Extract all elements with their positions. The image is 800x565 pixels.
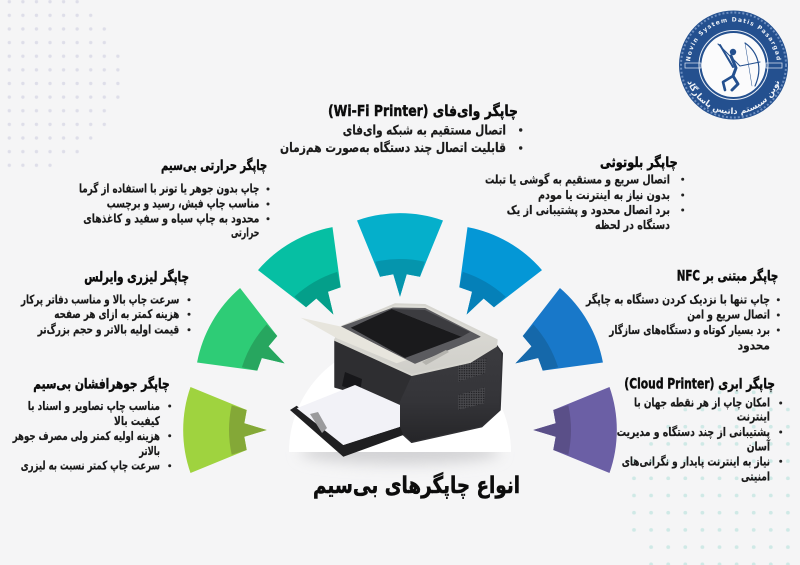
bullets: سرعت چاپ بالا و مناسب دفاتر پرکار xyxy=(20,292,179,307)
bullets: بالاتر xyxy=(139,444,160,458)
dot pattern: top left xyxy=(2,0,125,172)
bullets xyxy=(585,292,780,353)
printer body xyxy=(335,340,502,442)
bullets xyxy=(485,172,684,232)
heading: چاپگر حرارتی بی‌سیم xyxy=(161,157,267,174)
bullets: اتصال سریع و امن xyxy=(687,308,770,323)
panel: inkjet printer xyxy=(12,375,171,472)
wedge: cloud (purple) xyxy=(533,387,617,473)
wedge: bluetooth (blue) xyxy=(429,221,546,336)
wedge: wi-fi (cyan) xyxy=(357,213,443,297)
bullets xyxy=(79,182,270,240)
bullets: امنیتی xyxy=(741,470,770,484)
wedge: nfc (dark blue) xyxy=(494,284,609,401)
bullets xyxy=(20,292,190,337)
printer lid xyxy=(335,304,497,375)
heading: چاپگر بلوتوثی xyxy=(600,154,678,171)
paper tray xyxy=(290,406,403,457)
paper flap xyxy=(301,318,407,363)
icon: archer xyxy=(718,43,760,90)
heading: چاپگر ابری (Cloud Printer) xyxy=(624,375,775,392)
paper stack xyxy=(297,385,400,445)
control buttons xyxy=(422,350,449,365)
panel: bluetooth printer xyxy=(485,154,684,232)
bullets: برد اتصال محدود و پشتیبانی از یک xyxy=(507,203,670,218)
bullets: مناسب چاپ تصاویر و اسناد با xyxy=(28,399,160,414)
bullets: محدود به چاپ سیاه و سفید و کاغذهای xyxy=(83,211,259,226)
printer recess xyxy=(342,308,480,363)
logo: Novin System Datis Pasargad seal: نوین سیستم داتیس پاسارگاد xyxy=(688,81,780,116)
wedge: laser (green) xyxy=(191,284,306,401)
wedge: inkjet (lime) xyxy=(183,387,267,473)
bullets: اینترنت xyxy=(737,410,770,424)
bullets: کیفیت بالا xyxy=(114,414,160,428)
bullets: قابلیت اتصال چند دستگاه به‌صورت هم‌زمان xyxy=(280,140,506,156)
bullets: هزینه اولیه کمتر ولی مصرف جوهر xyxy=(12,429,160,444)
bullets: محدود xyxy=(738,338,770,353)
bullets: مناسب چاپ فیش، رسید و برچسب xyxy=(107,196,259,211)
panel: laser printer xyxy=(20,269,190,337)
bullets: هزینه کمتر به ازای هر صفحه xyxy=(54,307,179,321)
panel: nfc printer xyxy=(585,268,780,353)
bullets xyxy=(12,399,171,472)
white half circle behind printer xyxy=(289,341,511,452)
heading: چاپگر وای‌فای (Wi-Fi Printer) xyxy=(328,102,518,121)
bullets: سرعت چاپ کمتر نسبت به لیزری xyxy=(21,458,160,472)
bullets: بدون نیاز به اینترنت یا مودم xyxy=(538,188,670,203)
logo: Novin System Datis Pasargad seal xyxy=(679,10,788,120)
wedge: thermal (teal) xyxy=(254,221,371,336)
paper guide xyxy=(310,412,327,433)
title: انواع چاپگرهای بی‌سیم xyxy=(313,472,520,499)
heading: چاپگر جوهرافشان بی‌سیم xyxy=(33,375,170,392)
bullets: آسان xyxy=(747,439,771,454)
logo: Novin System Datis Pasargad seal: Novin System Datis Pasargad xyxy=(686,17,782,62)
panel: wi-fi printer xyxy=(280,102,522,156)
bullets: اتصال مستقیم به شبکه وای‌فای xyxy=(343,124,506,138)
bullets xyxy=(280,124,522,156)
bullets: حرارتی xyxy=(231,226,259,240)
bullets: قیمت اولیه بالاتر و حجم بزرگ‌تر xyxy=(37,321,179,337)
bullets xyxy=(617,396,782,484)
bullets: دستگاه در لحظه xyxy=(595,218,670,232)
printer shadow xyxy=(300,440,500,464)
bullets: اتصال سریع و مستقیم به گوشی یا تبلت xyxy=(485,172,670,188)
printer illustration xyxy=(290,304,502,457)
heading: چاپگر لیزری وایرلس xyxy=(84,269,189,286)
printer vents xyxy=(458,358,487,382)
dot pattern: bottom right xyxy=(625,384,796,565)
panel: thermal printer xyxy=(79,157,270,240)
bullets: چاپ بدون جوهر یا تونر با استفاده از گرما xyxy=(79,182,259,197)
panel: cloud printer xyxy=(617,375,782,484)
